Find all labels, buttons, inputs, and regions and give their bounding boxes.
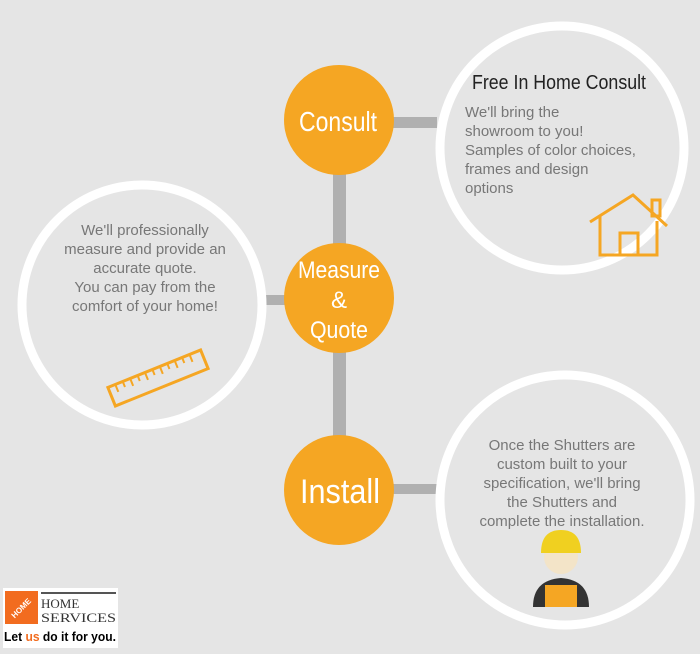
step: consult [284, 65, 394, 175]
panel: consult ring: frames and design [465, 161, 588, 178]
logo: SERVICES [41, 610, 116, 625]
step: measure: Quote [310, 317, 368, 344]
panel: measure ring: You can pay from the [74, 279, 216, 296]
panel: install ring: Once the Shutters are [489, 437, 635, 454]
panel: consult ring: options [465, 180, 513, 197]
panel: measure ring: accurate quote. [93, 260, 197, 277]
panel: install ring [440, 375, 690, 625]
step: install: Install [300, 473, 380, 511]
panel: install ring: custom built to your [497, 456, 627, 473]
logo [3, 588, 118, 648]
panel: consult ring [440, 26, 684, 270]
logo: HOME [10, 596, 33, 620]
panel: measure ring: We'll professionally [81, 222, 209, 239]
panel: consult ring: Samples of color choices, [465, 142, 636, 159]
step: measure: & [331, 287, 347, 314]
icon: ruler [108, 350, 208, 406]
panel: consult ring: showroom to you! [465, 123, 583, 140]
panel: install ring: complete the installation. [479, 513, 645, 530]
panel: measure ring: measure and provide an [64, 241, 226, 258]
connectors [262, 117, 440, 494]
panel: consult ring: We'll bring the [465, 104, 559, 121]
step: install [284, 435, 394, 545]
step: measure: Measure [298, 257, 380, 284]
panel: install ring: the Shutters and [507, 494, 617, 511]
panel: consult ring: Free In Home Consult [472, 72, 646, 94]
step: consult: Consult [299, 106, 377, 137]
icon: house [590, 195, 667, 255]
logo: Let us do it for you. [4, 629, 116, 644]
logo: HOME [41, 596, 79, 611]
icon: worker [533, 530, 589, 607]
step: measure [284, 243, 394, 353]
panel: measure ring [22, 185, 262, 425]
panel: install ring: specification, we'll bring [483, 475, 641, 492]
panel: measure ring: comfort of your home! [72, 298, 218, 315]
